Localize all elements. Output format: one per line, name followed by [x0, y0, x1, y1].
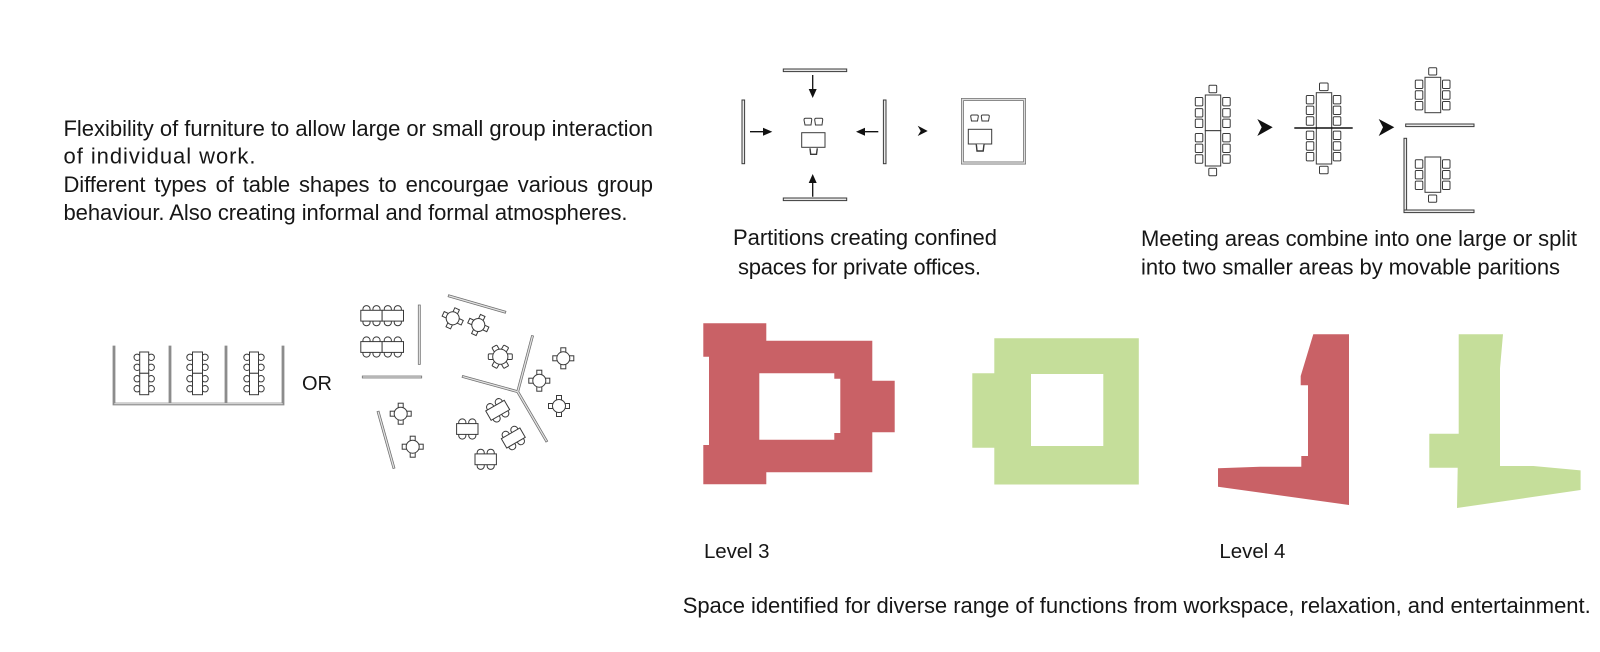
caption: partitions	[733, 225, 997, 280]
table with partition line	[1294, 83, 1353, 174]
split meeting rooms	[1404, 68, 1474, 213]
caption: partitions: spaces for private offices.	[738, 254, 981, 280]
partitions	[742, 69, 886, 201]
caption: meeting areas	[1141, 226, 1577, 280]
arrowhead two	[1379, 119, 1394, 136]
combined meeting table	[1195, 85, 1230, 176]
enclosed private office	[962, 100, 1024, 163]
plan: level 4 red	[1218, 334, 1349, 505]
text block: furniture flexibility: of individual work.	[64, 144, 256, 168]
text block: furniture flexibility: Different types of table shapes to encourgae various group	[64, 172, 653, 197]
text block: furniture flexibility	[64, 116, 653, 225]
small rectangular tables	[457, 396, 528, 469]
diagram: meeting areas combine or split	[1195, 68, 1474, 213]
table group 1	[134, 352, 154, 395]
plan: level 3 red	[703, 323, 895, 484]
paired long tables	[361, 306, 403, 357]
diagram: three enclosed group tables	[114, 347, 283, 404]
next-step arrowhead	[918, 126, 928, 136]
caption: space functions: Space identified for diverse range of functions from workspace, relaxation, and entertainment.	[683, 593, 1591, 618]
diagram: partitions closing around a private desk	[742, 69, 1024, 201]
caption: meeting areas: into two smaller areas by movable paritions	[1141, 254, 1560, 280]
plan: level 4 green	[1429, 334, 1581, 508]
diagram: scattered informal furniture	[361, 296, 574, 469]
label: level 4: Level 4	[1219, 540, 1285, 563]
caption: partitions: Partitions creating confined	[733, 225, 997, 250]
table group 2	[187, 352, 208, 395]
desk with chairs	[802, 118, 825, 154]
label: level 3: Level 3	[704, 540, 770, 563]
text block: furniture flexibility: behaviour. Also creating informal and formal atmospheres.	[64, 200, 628, 225]
round tables	[390, 304, 574, 457]
text block: furniture flexibility: Flexibility of furniture to allow large or small group interaction	[64, 116, 653, 141]
caption: meeting areas: Meeting areas combine into one large or split	[1141, 226, 1577, 251]
arrowhead one	[1257, 119, 1273, 136]
plan: level 3 green	[972, 338, 1139, 484]
label: OR: OR	[302, 373, 332, 395]
table group 3	[244, 352, 264, 395]
arrows toward desk	[750, 75, 878, 197]
movable partitions	[363, 296, 546, 467]
